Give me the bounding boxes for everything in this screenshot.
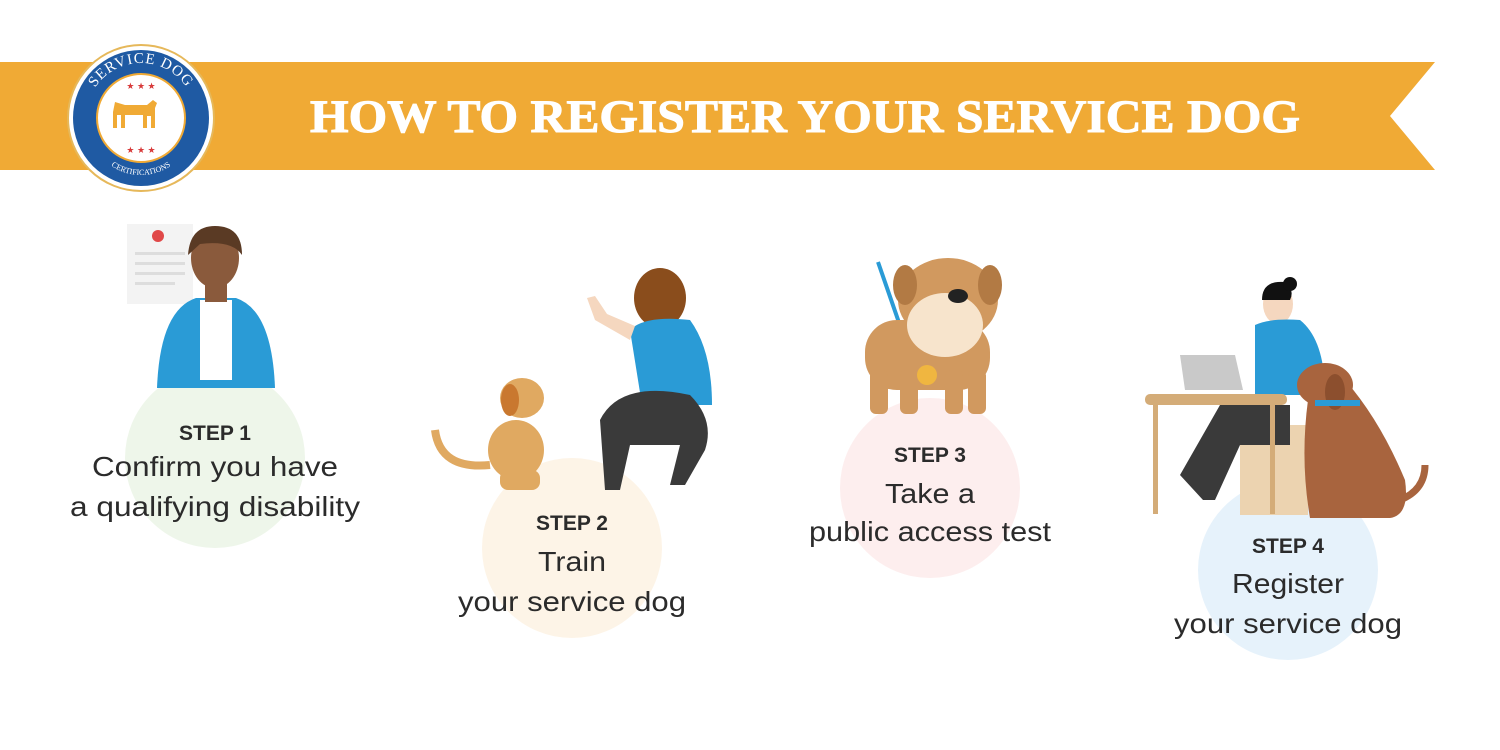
step 3 text: STEP 3: [894, 444, 966, 467]
step 2: your service dog: [458, 586, 686, 617]
step 1: Confirm you have: [92, 451, 338, 482]
step 4: your service dog: [1174, 608, 1402, 639]
step 3: Take a: [885, 478, 975, 509]
logo badge: CERTIFICATIONS: [112, 162, 170, 175]
illustration: document and person: [127, 224, 275, 388]
illustration: woman at laptop with dog: [1145, 277, 1425, 518]
logo badge: [67, 44, 215, 192]
logo badge: ★ ★ ★: [126, 145, 156, 155]
step 4: Register: [1232, 568, 1344, 599]
step 1 text: STEP 1: [179, 422, 251, 445]
step 3: public access test: [809, 516, 1051, 547]
illustration: dog with medal: [865, 258, 1002, 414]
step 2 text: STEP 2: [536, 512, 608, 535]
step 1: a qualifying disability: [70, 491, 360, 522]
step 4 text: STEP 4: [1252, 535, 1324, 558]
logo badge: ★ ★ ★: [126, 81, 156, 91]
step 4: [1145, 277, 1425, 660]
step 1: [70, 224, 360, 548]
step 2: [435, 268, 712, 638]
logo badge: SERVICE DOG: [88, 53, 193, 87]
banner: [0, 62, 1435, 170]
step 3: [809, 258, 1051, 578]
title: HOW TO REGISTER YOUR SERVICE DOG: [310, 91, 1300, 143]
illustration: woman training dog: [435, 268, 712, 490]
step 2: Train: [538, 546, 606, 577]
